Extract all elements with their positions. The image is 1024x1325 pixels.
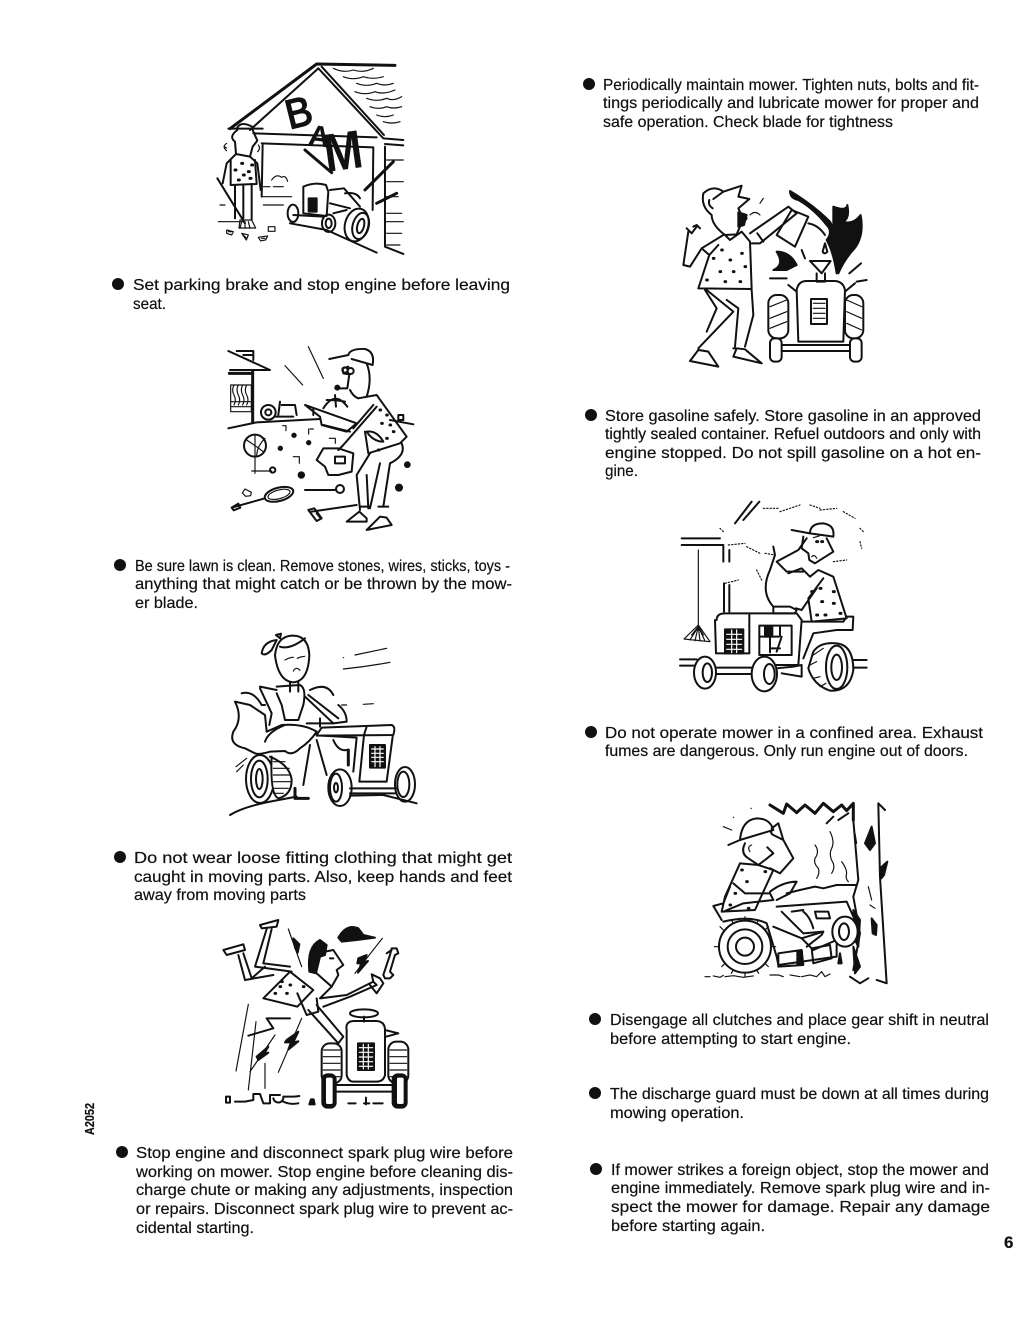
illustration: mower crashing into garage [217, 64, 403, 254]
text: disengage clutches: before attempting to start engine. [610, 1031, 851, 1048]
text: discharge guard: mowing operation. [610, 1105, 744, 1122]
text: loose clothing: away from moving parts [134, 887, 306, 904]
text: foreign object: engine immediately. Remove spark plug wire and in- [611, 1180, 990, 1197]
text: confined area: Do not operate mower in a confined area. Exhaust [605, 725, 984, 742]
illustration: man shocked by spark plug [223, 920, 408, 1108]
text: maintain mower: tings periodically and lubricate mower for proper and [603, 95, 979, 112]
text: disengage clutches: Disengage all clutches and place gear shift in neutral [610, 1012, 989, 1029]
text: disconnect spark plug: charge chute or making any adjustments, inspection [136, 1182, 513, 1199]
bullet: discharge guard [589, 1087, 601, 1099]
text: disconnect spark plug: working on mower. Stop engine before cleaning dis- [135, 1164, 513, 1181]
text: maintain mower: safe operation. Check blade for tightness [603, 114, 893, 131]
lettering: BAM: M [320, 119, 366, 184]
bullet: loose clothing [114, 851, 126, 863]
text: lawn: er blade. [135, 595, 198, 612]
illustration: gasoline spill flames [683, 186, 867, 367]
illustration: mower crashed into tree [705, 803, 887, 983]
lettering: BAM [280, 86, 366, 184]
text: disconnect spark plug: or repairs. Disconnect spark plug wire to prevent ac- [136, 1201, 513, 1218]
code: A2052: A2052 [83, 1103, 97, 1135]
text: foreign object: spect the mower for damage. Repair any damage [611, 1199, 990, 1216]
text: parking brake: seat. [133, 296, 166, 313]
bullet: store gasoline [585, 409, 597, 421]
lettering: BAM: A [306, 119, 332, 155]
text: parking brake: Set parking brake and stop engine before leaving [133, 277, 510, 294]
text: disconnect spark plug: cidental starting. [136, 1220, 254, 1237]
text: maintain mower: Periodically maintain mower. Tighten nuts, bolts and fit- [603, 77, 979, 94]
text: foreign object: If mower strikes a foreign object, stop the mower and [611, 1162, 989, 1179]
text: lawn: anything that might catch or be thrown by the mow- [135, 576, 512, 593]
icon: mower [303, 184, 360, 216]
bullet: disconnect spark plug [116, 1146, 128, 1158]
text: lawn: Be sure lawn is clean. Remove stones, wires, sticks, toys - [135, 558, 510, 575]
text: confined area: fumes are dangerous. Only run engine out of doors. [605, 743, 968, 760]
text: store gasoline: gine. [605, 463, 638, 480]
text: foreign object: before starting again. [611, 1218, 765, 1235]
text: disconnect spark plug: Stop engine and disconnect spark plug wire before [136, 1145, 513, 1162]
bullet: disengage clutches [589, 1013, 601, 1025]
text: store gasoline: tightly sealed container. Refuel outdoors and only with [605, 426, 981, 443]
lettering: BAM: B [280, 86, 317, 138]
illustration: girl in loose dress on mower [230, 634, 417, 815]
bullet: lawn [114, 559, 126, 571]
text: store gasoline: Store gasoline safely. Store gasoline in an approved [605, 408, 981, 425]
text: store gasoline: engine stopped. Do not spill gasoline on a hot en- [605, 445, 981, 462]
illustration: man clearing lawn [228, 347, 413, 530]
bullet: confined area [585, 726, 597, 738]
text: discharge guard: The discharge guard must be down at all times during [610, 1086, 989, 1103]
illustration: exhaust fumes in confined area [680, 502, 867, 691]
page number: 6 [1004, 1233, 1013, 1252]
bullet: maintain mower [583, 78, 595, 90]
text: loose clothing: caught in moving parts. Also, keep hands and feet [134, 869, 513, 886]
bullet: foreign object [590, 1163, 602, 1175]
text: loose clothing: Do not wear loose fitting clothing that might get [134, 850, 513, 867]
bullet: parking brake [112, 278, 124, 290]
